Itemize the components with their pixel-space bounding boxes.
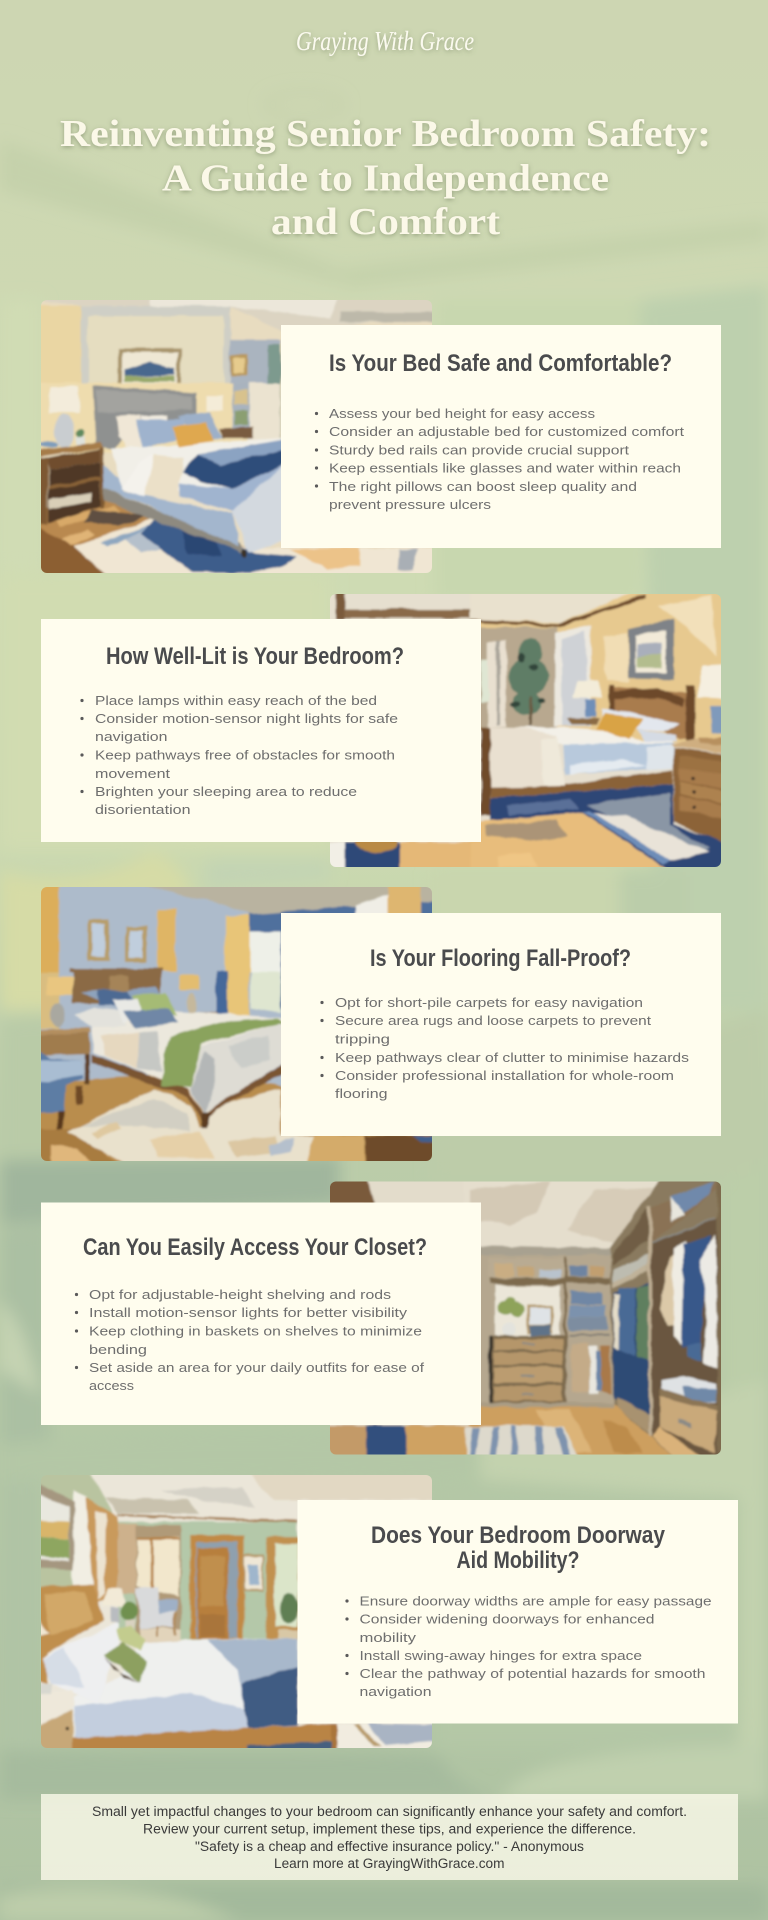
footer panel <box>41 1794 738 1880</box>
title: Reinventing Senior Bedroom Safety: <box>60 113 711 155</box>
bullet list: movement <box>95 766 170 781</box>
logo: Graying With Grace: Graying With Grace <box>296 26 474 56</box>
heading: Aid Mobility? <box>456 1547 580 1574</box>
illustration: warm bedroom with wooden bed <box>330 594 721 867</box>
bullet list: Clear the pathway of potential hazards for smooth <box>360 1666 706 1681</box>
panel: bed safety <box>31 290 721 583</box>
title: A Guide to Independence <box>162 158 609 200</box>
bullet list: Place lamps within easy reach of the bed <box>95 693 377 708</box>
card <box>41 619 481 842</box>
bullet list: access <box>89 1378 135 1393</box>
title: and Comfort <box>271 201 500 243</box>
footer panel: Small yet impactful changes to your bedroom can significantly enhance your safety and comfort. <box>92 1804 687 1819</box>
bullet list: Consider professional installation for whole-room <box>335 1068 674 1083</box>
bullet list: flooring <box>335 1086 388 1101</box>
illustration: bedroom with blue throw <box>41 300 432 573</box>
bullet list <box>345 1594 712 1699</box>
card <box>298 1500 738 1724</box>
bullet list: The right pillows can boost sleep quality and <box>329 479 637 494</box>
heading: Is Your Bed Safe and Comfortable? <box>329 350 672 377</box>
card <box>41 1202 481 1425</box>
bullet list: bending <box>89 1342 147 1357</box>
bullet list: prevent pressure ulcers <box>329 497 492 512</box>
illustration: green bedroom with doorway <box>41 1475 432 1748</box>
heading <box>371 1522 666 1574</box>
bullet list: Keep essentials like glasses and water within reach <box>329 461 681 476</box>
bullet list: Brighten your sleeping area to reduce <box>95 784 357 799</box>
bullet list: disorientation <box>95 802 190 817</box>
title <box>60 113 711 243</box>
panel: doorway mobility <box>31 1465 738 1758</box>
bullet list <box>320 995 690 1101</box>
footer panel: "Safety is a cheap and effective insurance policy." - Anonymous <box>195 1839 584 1854</box>
bullet list: navigation <box>95 729 168 744</box>
bullet list: tripping <box>335 1032 390 1046</box>
bullet list: Consider an adjustable bed for customized comfort <box>329 424 684 439</box>
bullet list: Consider widening doorways for enhanced <box>360 1612 654 1626</box>
bullet list: Ensure doorway widths are ample for easy passage <box>360 1594 712 1608</box>
bullet list: Install swing-away hinges for extra space <box>360 1648 642 1663</box>
bullet list: Install motion-sensor lights for better visibility <box>89 1305 408 1320</box>
bullet list <box>75 1287 424 1393</box>
heading: Does Your Bedroom Doorway <box>371 1522 666 1549</box>
bullet list: navigation <box>360 1684 432 1699</box>
bullet list: mobility <box>360 1630 417 1645</box>
bullet list: Keep clothing in baskets on shelves to minimize <box>89 1324 422 1338</box>
bullet list: Sturdy bed rails can provide crucial support <box>329 442 629 457</box>
panel: flooring <box>31 877 721 1172</box>
bullet list: Consider motion-sensor night lights for safe <box>95 711 398 726</box>
bullet list: Secure area rugs and loose carpets to prevent <box>335 1013 651 1028</box>
bullet list <box>80 693 398 817</box>
panel: lighting <box>41 584 733 877</box>
footer panel: Learn more at GrayingWithGrace.com <box>274 1856 504 1871</box>
bullet list: Assess your bed height for easy access <box>329 406 596 421</box>
illustration: blue-walled bedroom with rug <box>41 887 432 1161</box>
bullet list: Keep pathways clear of clutter to minimise hazards <box>335 1050 690 1065</box>
card <box>281 325 721 548</box>
heading: Is Your Flooring Fall-Proof? <box>370 945 631 972</box>
card <box>281 913 721 1136</box>
bullet list: Opt for short-pile carpets for easy navigation <box>335 995 643 1010</box>
bullet list <box>315 406 684 512</box>
bullet list: Keep pathways free of obstacles for smooth <box>95 748 395 762</box>
bullet list: Opt for adjustable-height shelving and rods <box>89 1287 392 1302</box>
panel: closet access <box>41 1170 733 1467</box>
bullet list: Set aside an area for your daily outfits for ease of <box>89 1360 424 1375</box>
illustration: walk-in closet <box>330 1182 721 1454</box>
heading: Can You Easily Access Your Closet? <box>83 1234 427 1261</box>
heading: How Well-Lit is Your Bedroom? <box>106 643 404 670</box>
footer panel: Review your current setup, implement these tips, and experience the difference. <box>143 1822 636 1836</box>
